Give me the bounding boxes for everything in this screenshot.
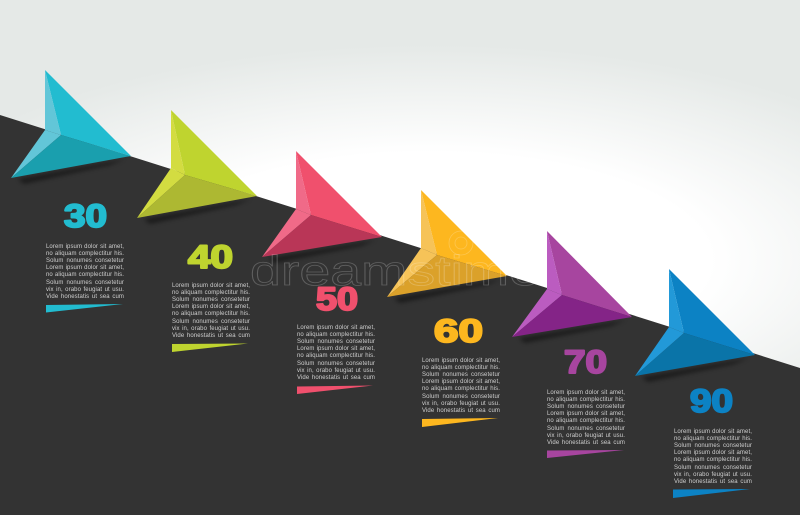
text block 30: Solum nonumes consetetur xyxy=(46,280,124,286)
text block 70: Lorem ipsum dolor sit amet, xyxy=(547,411,625,417)
text block 30: Lorem ipsum dolor sit amet, xyxy=(46,265,124,271)
step 60 xyxy=(387,190,507,427)
step 50 xyxy=(262,151,382,394)
text block 50: Vide honestatis ut sea cum xyxy=(297,375,375,381)
text block 30: Lorem ipsum dolor sit amet, xyxy=(46,244,124,250)
text block 70: Solum nonumes consetetur xyxy=(547,404,625,410)
text block 50: Lorem ipsum dolor sit amet, xyxy=(297,324,375,330)
text block 70: Lorem ipsum dolor sit amet, xyxy=(547,390,625,396)
text block 70: no aliquam complectitur his. xyxy=(547,397,625,403)
text block 40: Lorem ipsum dolor sit amet, xyxy=(172,282,250,288)
text block 60 xyxy=(422,357,500,417)
text block 70: vix in, orabo feugiat ut usu. xyxy=(547,433,625,439)
arrow 90 xyxy=(635,269,755,382)
text block 40 xyxy=(172,282,250,342)
text block 90 xyxy=(674,428,752,488)
text block 60: Vide honestatis ut sea cum xyxy=(422,408,500,414)
text block 90: vix in, orabo feugiat ut usu. xyxy=(674,472,752,478)
number 40: 40 xyxy=(188,239,233,275)
watermark xyxy=(250,231,540,294)
arrow 60 xyxy=(387,190,507,303)
text block 70: no aliquam complectitur his. xyxy=(547,418,625,424)
text block 60: no aliquam complectitur his. xyxy=(422,386,500,392)
text block 60: Solum nonumes consetetur xyxy=(422,394,500,400)
number 50: 50 xyxy=(316,281,358,317)
text block 50 xyxy=(297,324,375,384)
bar 60 xyxy=(422,418,498,427)
text block 60: Lorem ipsum dolor sit amet, xyxy=(422,379,500,385)
bar 90 xyxy=(673,489,750,498)
step 30 xyxy=(11,70,131,312)
text block 30: no aliquam complectitur his. xyxy=(46,251,124,257)
text block 60: vix in, orabo feugiat ut usu. xyxy=(422,401,500,407)
arrow 30 xyxy=(11,70,131,184)
text block 70: Vide honestatis ut sea cum xyxy=(547,440,625,446)
bar 50 xyxy=(297,386,373,394)
text block 50: Solum nonumes consetetur xyxy=(297,361,375,367)
number 90: 90 xyxy=(690,383,733,419)
text block 60: no aliquam complectitur his. xyxy=(422,365,500,371)
text block 40: Solum nonumes consetetur xyxy=(172,319,250,325)
text block 30: Vide honestatis ut sea cum xyxy=(46,294,124,300)
text block 50: no aliquam complectitur his. xyxy=(297,353,375,359)
text block 40: no aliquam complectitur his. xyxy=(172,311,250,317)
bar 40 xyxy=(172,344,248,352)
bar 30 xyxy=(46,304,123,312)
text block 50: no aliquam complectitur his. xyxy=(297,332,375,338)
text block 90: Solum nonumes consetetur xyxy=(674,465,752,471)
bar 70 xyxy=(547,450,624,458)
text block 40: Lorem ipsum dolor sit amet, xyxy=(172,304,250,310)
text block 90: Solum nonumes consetetur xyxy=(674,443,752,449)
text block 30: vix in, orabo feugiat ut usu. xyxy=(46,287,124,293)
text block 40: no aliquam complectitur his. xyxy=(172,290,250,296)
text block 90: Lorem ipsum dolor sit amet, xyxy=(674,450,752,456)
text block 70 xyxy=(547,389,625,449)
dark diagonal panel xyxy=(0,115,800,515)
watermark: dreamstime xyxy=(250,247,540,294)
text block 50: Lorem ipsum dolor sit amet, xyxy=(297,346,375,352)
text block 70: Solum nonumes consetetur xyxy=(547,426,625,432)
text block 60: Solum nonumes consetetur xyxy=(422,372,500,378)
text block 30 xyxy=(46,243,124,303)
text block 40: Solum nonumes consetetur xyxy=(172,297,250,303)
number 30: 30 xyxy=(64,198,107,234)
text block 40: Vide honestatis ut sea cum xyxy=(172,333,250,339)
number 60: 60 xyxy=(434,313,483,349)
text block 90: no aliquam complectitur his. xyxy=(674,457,752,463)
step 90 xyxy=(635,269,755,498)
step 70 xyxy=(512,231,632,458)
number 70: 70 xyxy=(564,344,607,380)
text block 60: Lorem ipsum dolor sit amet, xyxy=(422,358,500,364)
text block 50: vix in, orabo feugiat ut usu. xyxy=(297,368,375,374)
arrow 50 xyxy=(262,151,382,263)
text block 30: no aliquam complectitur his. xyxy=(46,272,124,278)
text block 50: Solum nonumes consetetur xyxy=(297,339,375,345)
text block 30: Solum nonumes consetetur xyxy=(46,258,124,264)
text block 90: Vide honestatis ut sea cum xyxy=(674,479,752,485)
text block 90: Lorem ipsum dolor sit amet, xyxy=(674,428,752,434)
text block 40: vix in, orabo feugiat ut usu. xyxy=(172,326,250,332)
arrow 70 xyxy=(512,231,632,343)
arrow 40 xyxy=(137,110,257,224)
text block 90: no aliquam complectitur his. xyxy=(674,436,752,442)
step 40 xyxy=(137,110,257,352)
